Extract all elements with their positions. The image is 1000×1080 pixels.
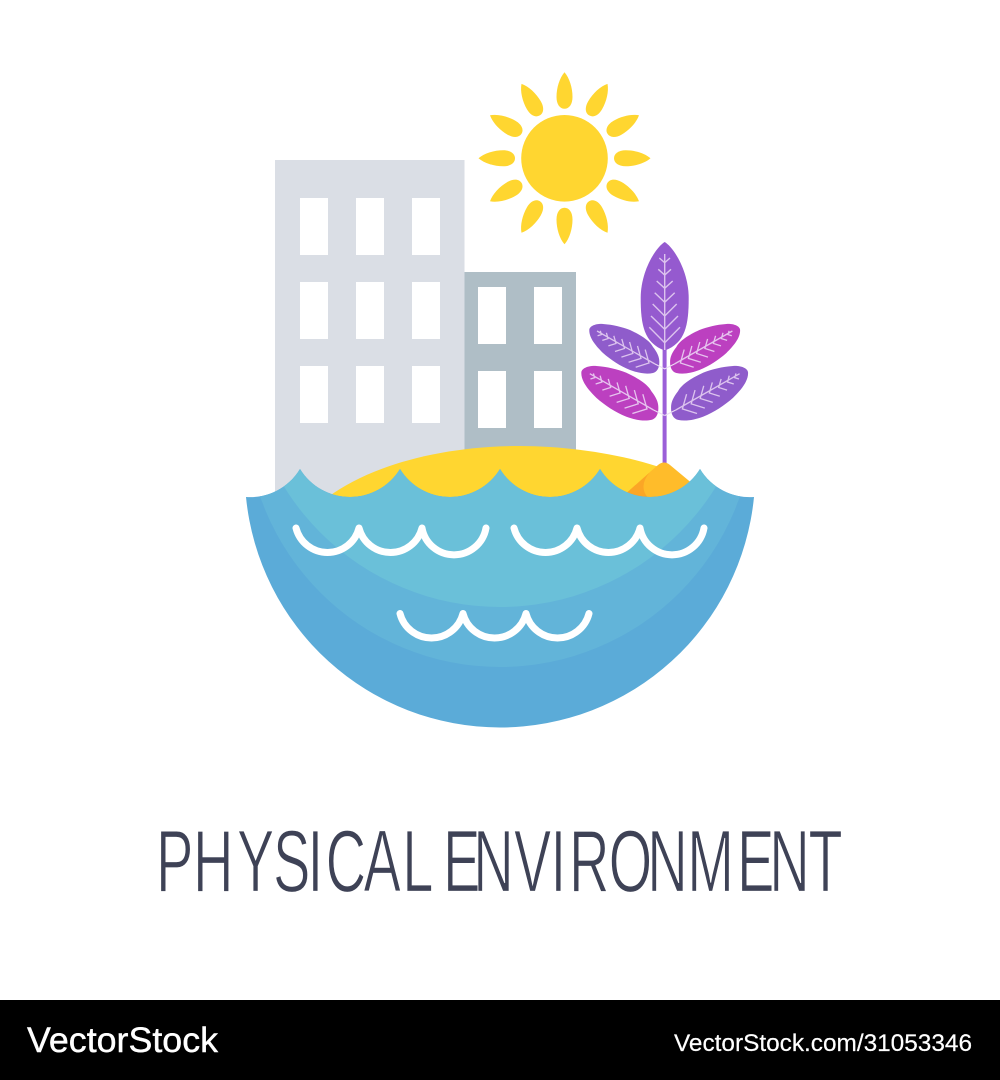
tall light grey building (275, 160, 464, 495)
title: PHYSICAL ENVIRONMENT (156, 811, 843, 911)
water bowl (246, 469, 754, 728)
plant (581, 242, 748, 465)
white wave line: bottom (400, 614, 589, 638)
footer bar (0, 1000, 1000, 1080)
white wave line: right (514, 528, 704, 555)
sand island (328, 446, 662, 500)
leaf: top (641, 242, 689, 350)
leaf: upper right (664, 324, 740, 374)
leaf: upper left (589, 324, 665, 374)
footer image id: VectorStock.com/31053346 (674, 1030, 972, 1057)
leaf: lower right (665, 366, 748, 421)
white wave line: left (296, 528, 486, 555)
leaf: lower left (581, 366, 665, 421)
plant stem (663, 345, 667, 465)
short blue-grey building (464, 272, 576, 457)
icon: sun (478, 72, 650, 244)
sand pile (622, 462, 694, 500)
footer logo text: VectorStock (27, 1021, 219, 1060)
